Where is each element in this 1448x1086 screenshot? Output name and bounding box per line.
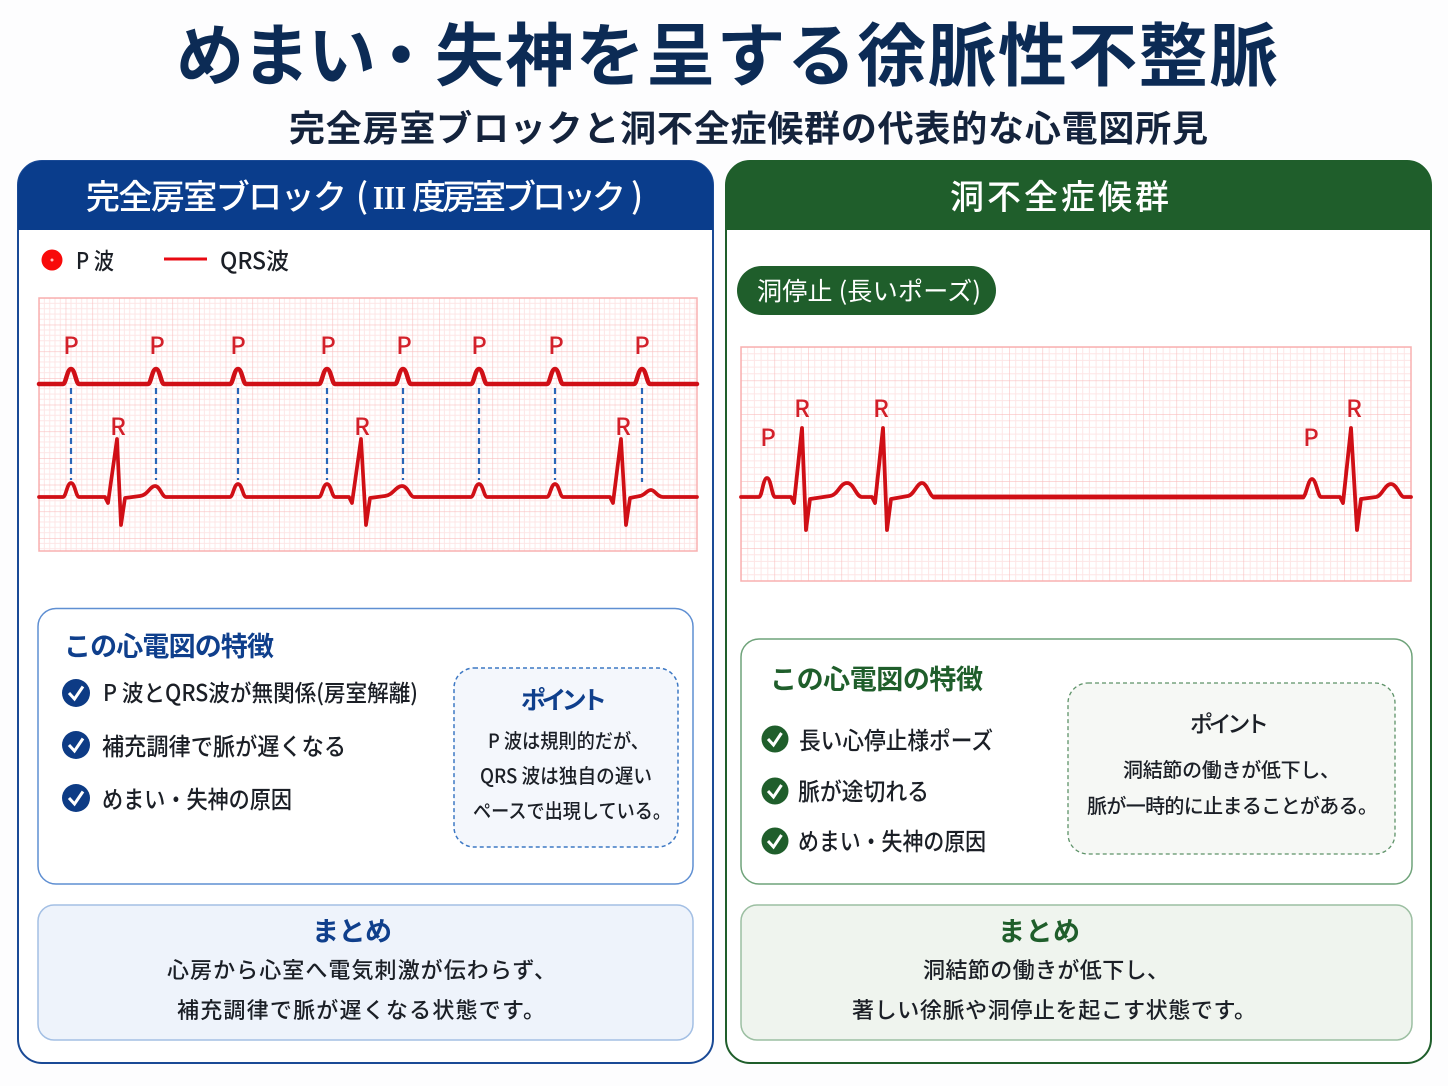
panel header: complete AV block — [18, 161, 713, 230]
legend — [42, 242, 289, 276]
wave labels: P — [230, 326, 246, 361]
sinus arrest pill: 洞停止 (長いポーズ) — [757, 272, 981, 308]
panel header: sick sinus syndrome — [726, 161, 1431, 230]
point callout: 脈が一時的に止まることがある。 — [1087, 790, 1378, 819]
ECG chart: sinus arrest — [741, 347, 1411, 581]
point callout: P 波は規則的だが、 — [488, 725, 649, 754]
point callout: QRS 波は独自の遅い — [480, 760, 652, 789]
summary box: 補充調律で脈が遅くなる状態です。 — [177, 993, 545, 1025]
check item 2: 補充調律で脈が遅くなる — [102, 727, 346, 762]
panel header: complete AV block: ) — [631, 169, 643, 218]
dashed P wave connectors — [71, 388, 642, 482]
atrial trace — [39, 369, 697, 384]
check item 3: めまい・失神の原因 — [102, 780, 292, 815]
flat pause segment — [934, 495, 1303, 499]
summary box: 洞結節の働きが低下し、 — [923, 953, 1169, 985]
wave labels — [760, 389, 1362, 453]
summary box — [38, 905, 693, 1040]
point callout: ポイント — [1190, 705, 1269, 739]
check item 3: めまい・失神の原因 — [798, 822, 986, 857]
features box — [38, 608, 693, 884]
wave labels: R — [1346, 389, 1362, 424]
wave labels: R — [873, 389, 889, 424]
wave labels: R — [794, 389, 810, 424]
sinus arrest pill — [737, 266, 996, 315]
summary box — [741, 905, 1412, 1040]
resumed beat — [1303, 428, 1411, 530]
panel: sick sinus syndrome — [726, 161, 1431, 1063]
ECG trace — [741, 428, 934, 530]
features heading: この心電図の特徴 — [770, 658, 983, 697]
wave labels: P — [760, 418, 776, 453]
wave labels: R — [354, 407, 370, 442]
summary box: まとめ — [312, 910, 392, 949]
point callout: ポイント — [521, 681, 607, 717]
features heading: この心電図の特徴 — [64, 625, 274, 664]
features box — [741, 639, 1412, 884]
check item 1: 長い心停止様ポーズ — [799, 721, 993, 756]
panel: complete AV block — [18, 161, 713, 1063]
wave labels: R — [110, 407, 126, 442]
wave labels: P — [1303, 418, 1319, 453]
check item 1: P 波とQRS波が無関係(房室解離) — [103, 674, 418, 708]
title: 失神を呈する徐脈性不整脈 — [435, 0, 1278, 100]
point callout — [1068, 683, 1395, 854]
check item 2: 脈が途切れる — [798, 772, 929, 807]
legend: QRS波 — [220, 242, 289, 276]
point callout — [454, 668, 678, 847]
point callout: ペースで出現している。 — [473, 795, 671, 824]
wave labels: P — [320, 326, 336, 361]
wave labels — [63, 326, 650, 442]
wave labels: P — [634, 326, 650, 361]
wave labels: P — [63, 326, 79, 361]
summary box: 著しい徐脈や洞停止を起こす状態です。 — [852, 993, 1256, 1025]
title: ・ — [367, 1, 435, 100]
wave labels: P — [396, 326, 412, 361]
wave labels: P — [471, 326, 487, 361]
panel header: complete AV block: 完全房室ブロック — [86, 170, 347, 219]
panel header: complete AV block: 度房室ブロック — [412, 170, 626, 219]
ECG chart: dissociated P waves and QRS complexes — [39, 298, 697, 551]
summary box: まとめ — [998, 910, 1080, 949]
panel header: complete AV block: ( — [356, 169, 368, 218]
wave labels: P — [548, 326, 564, 361]
subtitle: 完全房室ブロックと洞不全症候群の代表的な心電図所見 — [289, 100, 1208, 152]
panel header: complete AV block: III — [373, 180, 406, 217]
point callout: 洞結節の働きが低下し、 — [1123, 754, 1340, 783]
title: めまい — [176, 1, 376, 100]
panel header: sick sinus syndrome: 洞不全症候群 — [950, 170, 1169, 219]
legend: P 波 — [76, 242, 114, 276]
summary box: 心房から心室へ電気刺激が伝わらず、 — [167, 953, 556, 985]
ventricular trace — [39, 439, 697, 525]
wave labels: R — [615, 407, 631, 442]
wave labels: P — [149, 326, 165, 361]
